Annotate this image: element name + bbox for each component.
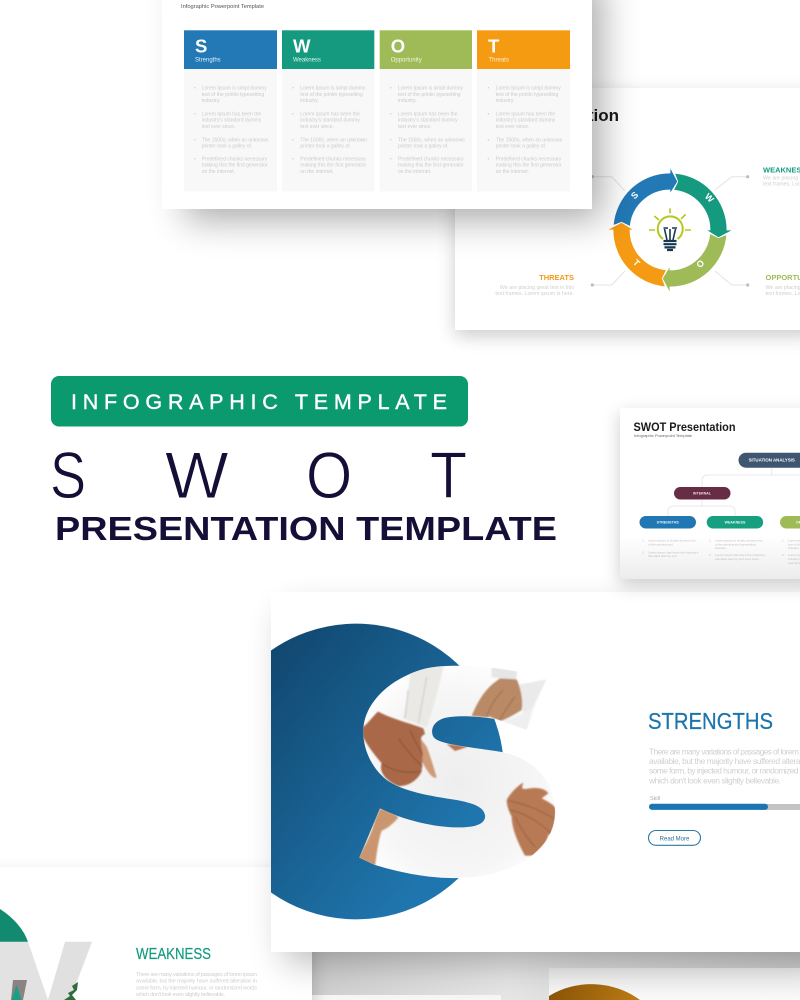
- icon: brown circle: [549, 984, 640, 1000]
- column: strengths: Predefined chunks necessary: [202, 156, 268, 162]
- title: SWOT: O: [306, 439, 352, 513]
- badge: infographic template: [51, 376, 468, 426]
- title: SWOT: [50, 438, 467, 513]
- column: threats: industry's standard dummy: [496, 118, 556, 124]
- column: strengths: Lorem Ipsum is simpl dummy: [202, 86, 267, 92]
- column: threats: text of the printin typesetting: [496, 92, 558, 98]
- slide: SWOT columns: [162, 0, 592, 209]
- badge: infographic template: INFOGRAPHIC TEMPLATE: [71, 390, 447, 414]
- photo: hands: [357, 665, 557, 867]
- column: opportunity: •: [390, 86, 392, 92]
- column: threats: Lorem Ipsum has been the: [496, 112, 555, 118]
- slide: bottom right with brown circle: [549, 968, 800, 1000]
- slide: SWOT cycle: [455, 88, 800, 330]
- column: opportunity: •: [390, 112, 392, 118]
- column: weakness: Predefined chunks necessary: [300, 156, 366, 162]
- column: weakness: The 1500s, when an unknown: [300, 137, 367, 143]
- column: strengths: Strengths: [195, 57, 221, 63]
- text block: weakness description: [135, 972, 257, 998]
- node: strengths: STRENGTHS: [657, 521, 679, 525]
- column: opportunity: printer took a galley of.: [398, 144, 449, 150]
- arrow: weakness: [674, 173, 733, 238]
- cycle letters: T: [631, 257, 642, 269]
- text block: strengths description: [648, 746, 800, 786]
- read more button: Read More: [660, 836, 690, 842]
- column: opportunity: Opportunity: [391, 57, 422, 63]
- column: opportunity: •: [390, 156, 392, 162]
- node: weakness: [707, 516, 763, 528]
- column: weakness: •: [292, 156, 294, 162]
- list: strengths: 1.: [642, 538, 645, 542]
- list: opportunity: [782, 538, 800, 565]
- column: opportunity: •: [390, 137, 392, 143]
- column: threats: [477, 30, 570, 191]
- column: opportunity: text of the printin typesetting: [398, 92, 461, 98]
- list: opportunity: 2.: [782, 553, 785, 557]
- text block: weakness description: available, but the majority have suffered alteration in: [136, 979, 257, 985]
- list: weakness: Lorem ipsum is simply dummy text: [715, 538, 763, 542]
- label: threats: [495, 273, 574, 297]
- slide: bottom centre: [312, 995, 501, 1000]
- column: weakness: Lorem Ipsum is simpl dummy: [300, 86, 366, 92]
- cycle letters: W: [703, 191, 716, 205]
- blue circle: [271, 624, 504, 919]
- node: situation analysis: SITUATION ANALYSIS: [749, 458, 795, 462]
- slide: weakness: [0, 867, 312, 1000]
- column: opportunity: The 1500s, when an unknown: [398, 137, 465, 143]
- node: strengths: [640, 516, 696, 528]
- column: weakness: text ever since.: [300, 124, 334, 130]
- white letter S: [359, 666, 555, 878]
- icon: light bulb: [649, 208, 691, 250]
- list: strengths: Lorem ipsum is simply dummy text: [648, 538, 696, 542]
- title: SWOT Presentation: [460, 106, 619, 125]
- cycle letters: [629, 190, 716, 270]
- column: threats: Lorem Ipsum is simpl dummy: [496, 86, 561, 92]
- column: strengths: S: [195, 36, 207, 56]
- column: opportunity: text ever since.: [398, 124, 432, 130]
- column: opportunity: Lorem Ipsum is simpl dummy: [398, 86, 464, 92]
- column: opportunity: industry's standard dummy: [398, 118, 458, 124]
- column: strengths: industry.: [202, 98, 220, 104]
- arrow: strengths: [613, 167, 678, 226]
- column: weakness: W: [293, 36, 311, 56]
- list: strengths: standard dummy text: [648, 554, 677, 558]
- list: weakness: [709, 538, 766, 561]
- column: opportunity: O: [391, 36, 405, 56]
- column: opportunity: [380, 30, 472, 191]
- subtitle: Infographic Powerpoint Template: [634, 433, 693, 438]
- column: strengths: industry's standard dummy: [202, 118, 262, 124]
- column: weakness: printer took a galley of.: [300, 144, 351, 150]
- heading: weakness: WEAKNESS: [136, 946, 211, 963]
- text block: weakness description: some form, by injected humour, or randomized words: [136, 986, 257, 992]
- title: SWOT Presentation: [634, 420, 736, 434]
- subtitle: presentation template: PRESENTATION TEMPLATE: [55, 510, 557, 547]
- column: opportunity: industry.: [398, 98, 417, 104]
- cycle letters: O: [694, 258, 706, 270]
- column: threats: •: [488, 112, 490, 118]
- slide: situation analysis org chart: [620, 408, 800, 579]
- column: strengths: Lorem Ipsum has been the: [202, 112, 261, 118]
- chart: circular arrows: [607, 167, 733, 293]
- column: strengths: printer took a galley of.: [202, 144, 252, 150]
- column: threats: The 1500s, when an unknown: [496, 137, 563, 143]
- column: strengths: •: [194, 86, 196, 92]
- column: threats: on the internet.: [496, 169, 529, 175]
- title: SWOT: S: [50, 438, 86, 512]
- list: weakness: 2.: [709, 553, 712, 557]
- label: weakness: [763, 166, 800, 188]
- label: opportunity: [766, 273, 800, 297]
- column: weakness: •: [292, 137, 294, 143]
- column: strengths: [184, 30, 277, 191]
- label: threats: THREATS: [539, 273, 574, 282]
- list: weakness: standard dummy text ever since.: [715, 557, 760, 561]
- column: strengths: •: [194, 156, 196, 162]
- read more button: [648, 830, 700, 845]
- title: SWOT: W: [165, 440, 229, 513]
- arrow: threats: [607, 222, 666, 287]
- column: threats: printer took a galley of.: [496, 144, 546, 150]
- column: weakness: industry.: [300, 98, 319, 104]
- list: weakness: 1.: [709, 538, 712, 542]
- column: strengths: The 1500s, when an unknown: [202, 137, 269, 143]
- column: opportunity: making this the first generator: [398, 163, 464, 169]
- column: threats: making this the first generator: [496, 163, 562, 169]
- column: threats: •: [488, 86, 490, 92]
- column: weakness: Weakness: [293, 57, 321, 63]
- column: strengths: •: [194, 112, 196, 118]
- column: threats: Predefined chunks necessary: [496, 156, 562, 162]
- list: weakness: Lorem ipsum has been the industry's: [715, 553, 766, 557]
- column: threats: Threats: [488, 57, 509, 63]
- label: threats: We are placing great text in this: [500, 285, 574, 291]
- list: weakness: industry.: [715, 546, 727, 550]
- column: weakness: making this the first generator: [300, 163, 366, 169]
- column: weakness: text of the printin typesetting: [300, 92, 363, 98]
- column: strengths: text ever since.: [202, 124, 235, 130]
- skill bar: Skill: [650, 796, 660, 802]
- text block: weakness description: There are many variations of passages of lorem ipsum: [136, 972, 257, 978]
- subtitle: Infographic Powerpoint Template: [181, 4, 264, 10]
- list: opportunity: 1.: [782, 538, 785, 542]
- node: internal: [674, 487, 730, 500]
- column: weakness: [282, 30, 374, 191]
- title: SWOT: T: [430, 440, 467, 513]
- column: threats: industry.: [496, 98, 514, 104]
- node: situation analysis: [738, 453, 800, 468]
- column: opportunity: Lorem Ipsum has been the: [398, 112, 458, 118]
- column: weakness: industry's standard dummy: [300, 118, 360, 124]
- list: opportunity: industry.: [788, 546, 800, 550]
- slide: strengths: [271, 592, 800, 952]
- column: opportunity: on the internet.: [398, 169, 431, 175]
- arrow: opportunity: [662, 234, 727, 293]
- column: threats: •: [488, 137, 490, 143]
- node: internal: INTERNAL: [693, 492, 712, 496]
- node: weakness: WEAKNESS: [725, 521, 746, 525]
- column: opportunity: Predefined chunks necessary: [398, 156, 464, 162]
- connector lines: [591, 175, 749, 287]
- column: strengths: •: [194, 137, 196, 143]
- column: weakness: Lorem Ipsum has been the: [300, 112, 360, 118]
- column: threats: T: [488, 36, 500, 56]
- list: strengths: of the printing and: [648, 542, 673, 546]
- column: strengths: on the internet.: [202, 169, 235, 175]
- column: weakness: •: [292, 112, 294, 118]
- node: opportunity: [780, 516, 800, 528]
- cycle letters: S: [629, 190, 640, 201]
- text block: weakness description: which don't look even slightly believable.: [135, 992, 225, 998]
- list: strengths: [642, 538, 699, 558]
- letter W graphic: [0, 942, 92, 1000]
- column: threats: text ever since.: [496, 124, 529, 130]
- list: strengths: Lorem ipsum has been the industry's: [648, 550, 699, 554]
- column: strengths: making this the first generator: [202, 163, 268, 169]
- column: weakness: on the internet.: [300, 169, 334, 175]
- background shadow band behind lower slides: [312, 952, 800, 1000]
- label: threats: text frames. Lorem ipsum is here.: [495, 291, 574, 297]
- icon: teal circle: [0, 909, 28, 942]
- column: weakness: •: [292, 86, 294, 92]
- list: weakness: of the printing and typesetting: [715, 542, 756, 546]
- column: threats: •: [488, 156, 490, 162]
- list: strengths: 2.: [642, 550, 645, 554]
- heading: strengths: STRENGTHS: [648, 708, 773, 734]
- skill bar: [649, 796, 800, 810]
- letter S photo graphic: [271, 624, 557, 919]
- text block: strengths description: which don't look even slightly believable.: [648, 776, 781, 786]
- column: strengths: text of the printin typesetting: [202, 92, 264, 98]
